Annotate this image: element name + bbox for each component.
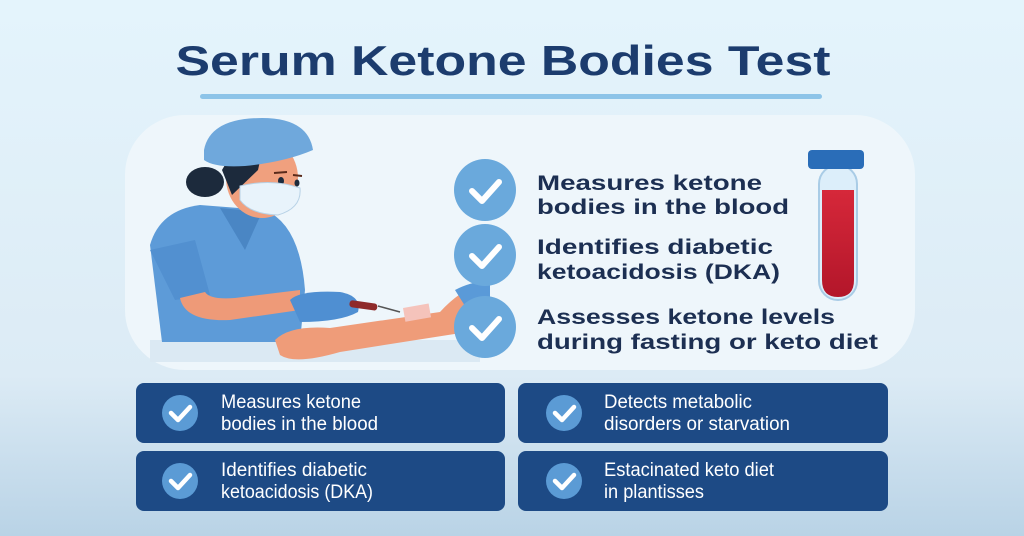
- checklist item 3: [454, 296, 878, 358]
- table: [150, 340, 480, 362]
- box: keto diet: [518, 451, 888, 511]
- box: identifies DKA: Identifies diabetic: [221, 460, 367, 481]
- checklist item 1: bodies in the blood: [537, 196, 789, 219]
- cap: [204, 118, 313, 166]
- syringe: [349, 300, 378, 311]
- checklist item 2: ketoacidosis (DKA): [537, 261, 780, 284]
- box: keto diet: in plantisses: [604, 482, 704, 503]
- sleeve: [150, 240, 210, 300]
- box: measures ketone bodies: [136, 383, 505, 443]
- eyes: [278, 177, 284, 185]
- panel: white background card: [125, 115, 915, 370]
- mask: [240, 182, 300, 215]
- title: Serum Ketone Bodies Test: [176, 37, 831, 84]
- box: detects metabolic disorders: [518, 383, 888, 443]
- checklist item 1: Measures ketone: [537, 172, 762, 195]
- checklist item 2: Identifies diabetic: [537, 236, 773, 259]
- title underline: [200, 94, 822, 99]
- patient arm: [275, 285, 480, 359]
- hair bun: [186, 167, 224, 197]
- head: [226, 138, 298, 218]
- illustration: nurse drawing blood: [150, 118, 490, 362]
- icon: blood test tube: [808, 150, 864, 300]
- checklist item 1: [454, 159, 789, 221]
- checklist item 3: during fasting or keto diet: [537, 331, 878, 354]
- arm nurse: [180, 290, 300, 320]
- box: detects metabolic disorders: disorders or starvation: [604, 414, 790, 435]
- box: identifies DKA: ketoacidosis (DKA): [221, 482, 373, 503]
- box: identifies DKA: [136, 451, 505, 511]
- box: keto diet: Estacinated keto diet: [604, 460, 775, 481]
- checklist item 2: [454, 224, 780, 286]
- box: measures ketone bodies: bodies in the blood: [221, 414, 378, 435]
- checklist item 3: Assesses ketone levels: [537, 306, 835, 329]
- body scrubs: [150, 205, 305, 342]
- glove: [290, 292, 359, 322]
- box: detects metabolic disorders: Detects metabolic: [604, 392, 752, 413]
- box: measures ketone bodies: Measures ketone: [221, 392, 361, 413]
